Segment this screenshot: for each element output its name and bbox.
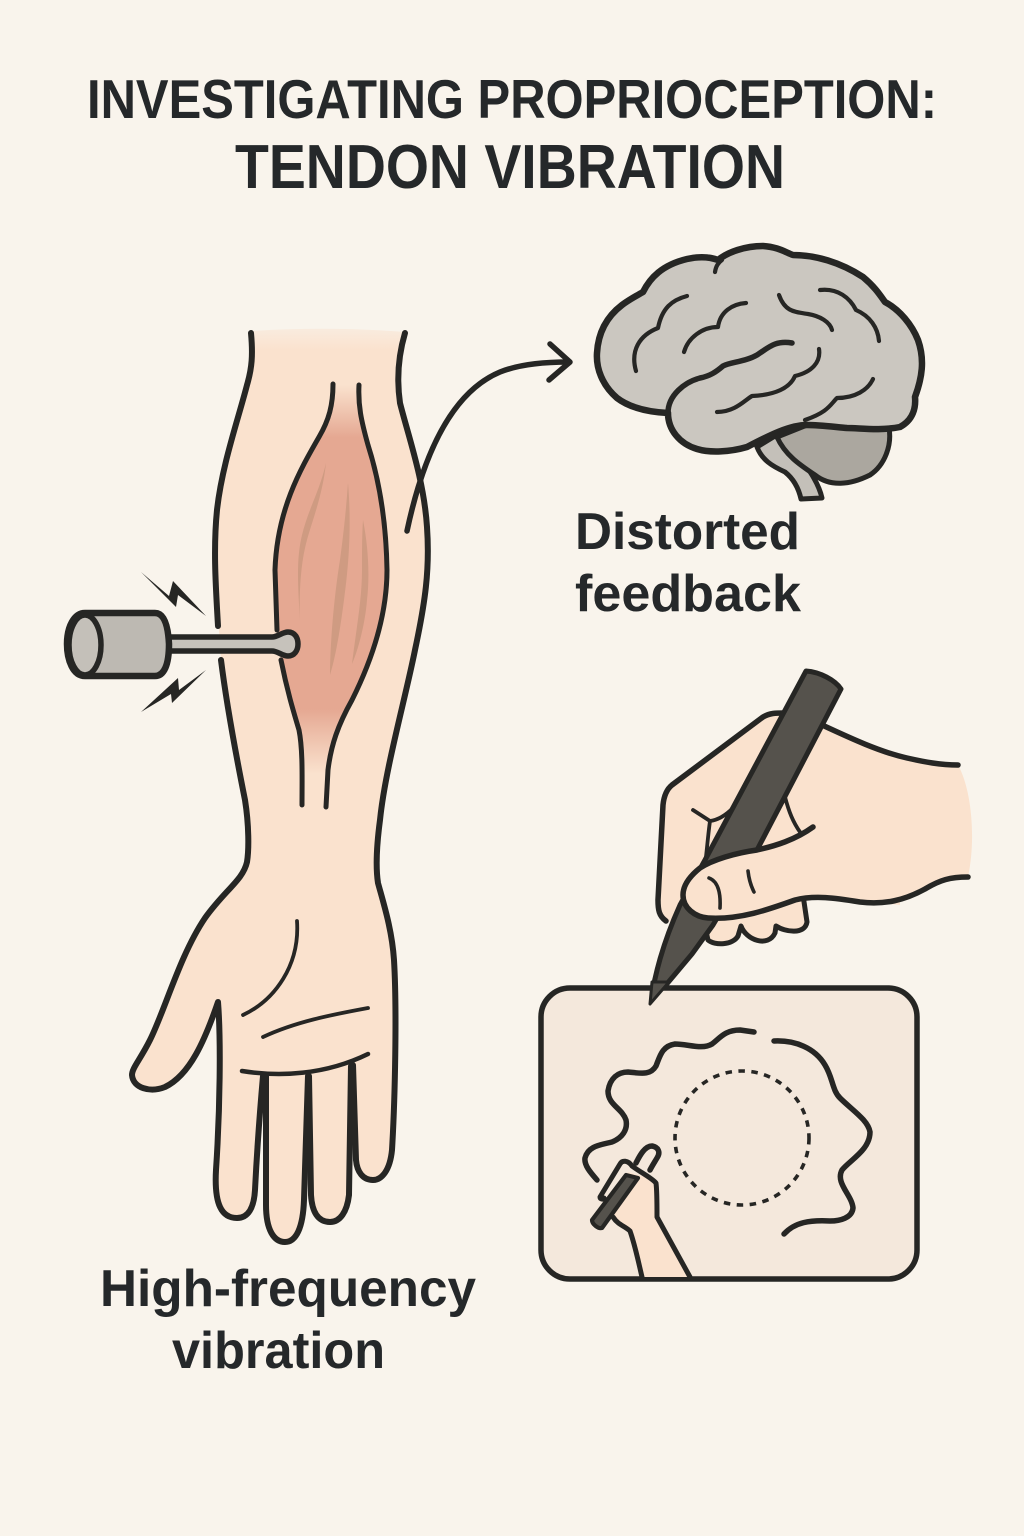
muscle — [275, 383, 387, 807]
palm creases — [242, 921, 368, 1074]
writing hand illustration — [650, 671, 972, 1004]
arm outline — [132, 333, 428, 1242]
brain stem — [757, 436, 822, 499]
hand outline — [658, 713, 785, 921]
device body — [67, 613, 169, 676]
drawing card — [541, 982, 917, 1279]
pen tip overlapping card — [650, 982, 669, 1004]
hand back — [658, 714, 972, 922]
label: distorted feedback — [575, 503, 801, 623]
fingers creases — [693, 797, 800, 865]
lower fingers — [700, 895, 807, 944]
forearm and hand illustration — [132, 329, 428, 1242]
distorted trace — [585, 1030, 870, 1234]
arrow to brain — [407, 344, 570, 531]
icon: upper vibration bolt — [141, 572, 206, 616]
icon: lower vibration bolt — [141, 670, 206, 712]
small pen tip — [636, 1146, 659, 1170]
card panel — [541, 988, 917, 1279]
thumb creases — [709, 871, 754, 908]
label: distorted feedback: feedback — [575, 565, 801, 623]
thumb — [683, 827, 900, 918]
title: INVESTIGATING PROPRIOCEPTION: — [87, 68, 937, 130]
small forearm and hand fill — [612, 1172, 690, 1277]
pen — [650, 671, 841, 1004]
title: TENDON VIBRATION — [235, 133, 785, 202]
brain folds — [634, 260, 879, 420]
dashed target circle — [675, 1071, 809, 1205]
cerebellum — [777, 425, 890, 483]
small pen — [592, 1175, 638, 1228]
cerebrum — [597, 246, 922, 451]
small hand with pen — [592, 1146, 690, 1277]
icon: vibration device — [67, 572, 298, 712]
title — [87, 68, 937, 202]
label: distorted feedback: Distorted — [575, 503, 800, 561]
device rod — [165, 632, 298, 656]
icon: brain — [597, 246, 922, 499]
label: high-frequency vibration: vibration — [172, 1322, 385, 1380]
label: high-frequency vibration: High-frequency — [100, 1260, 476, 1318]
thumb outline — [683, 827, 968, 918]
small hand outline — [600, 1161, 690, 1277]
label: high-frequency vibration — [100, 1260, 476, 1380]
arm skin fill — [132, 329, 428, 1242]
